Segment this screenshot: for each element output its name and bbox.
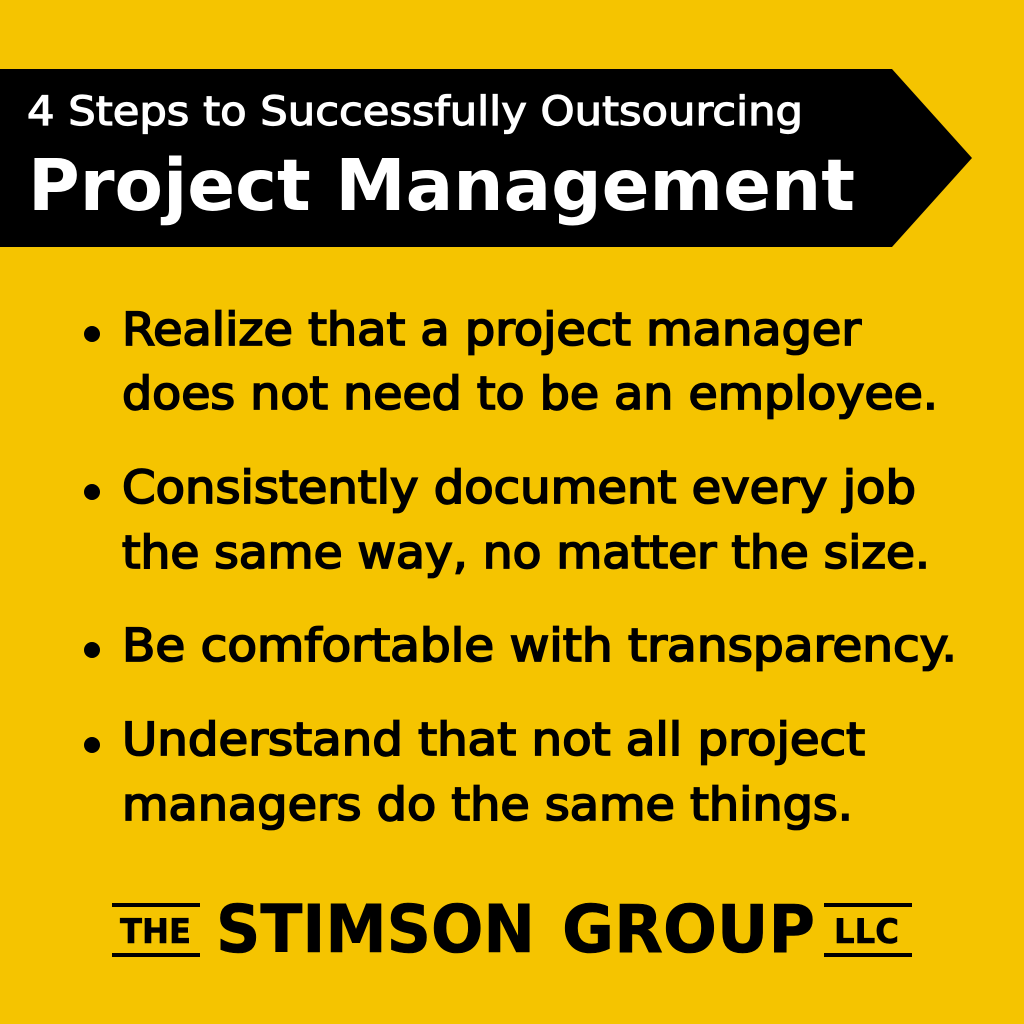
title: Project Management — [28, 144, 855, 227]
logo: The Stimson Group LLC: STIMSON — [216, 891, 535, 968]
bullet 4: Understand that not all project — [122, 713, 865, 766]
logo: The Stimson Group LLC: LLC — [834, 912, 899, 952]
logo: The Stimson Group LLC: THE — [120, 912, 191, 952]
bullet 2: the same way, no matter the size. — [122, 526, 930, 579]
bullet 2: Consistently document every job — [122, 461, 916, 514]
bullet 1 — [84, 303, 938, 420]
subtitle: 4 Steps to Successfully Outsourcing — [27, 89, 803, 135]
bullet 4 — [84, 713, 865, 831]
bullet 1: Realize that a project manager — [122, 303, 862, 356]
bullet 3: Be comfortable with transparency. — [122, 619, 957, 672]
bullet 1: does not need to be an employee. — [122, 367, 938, 420]
bullet list — [84, 303, 957, 831]
title banner — [0, 69, 972, 247]
logo: The Stimson Group LLC — [112, 891, 912, 968]
bullet 4: managers do the same things. — [122, 778, 853, 831]
bullet 2 — [84, 461, 930, 579]
logo: The Stimson Group LLC: GROUP — [562, 891, 815, 968]
